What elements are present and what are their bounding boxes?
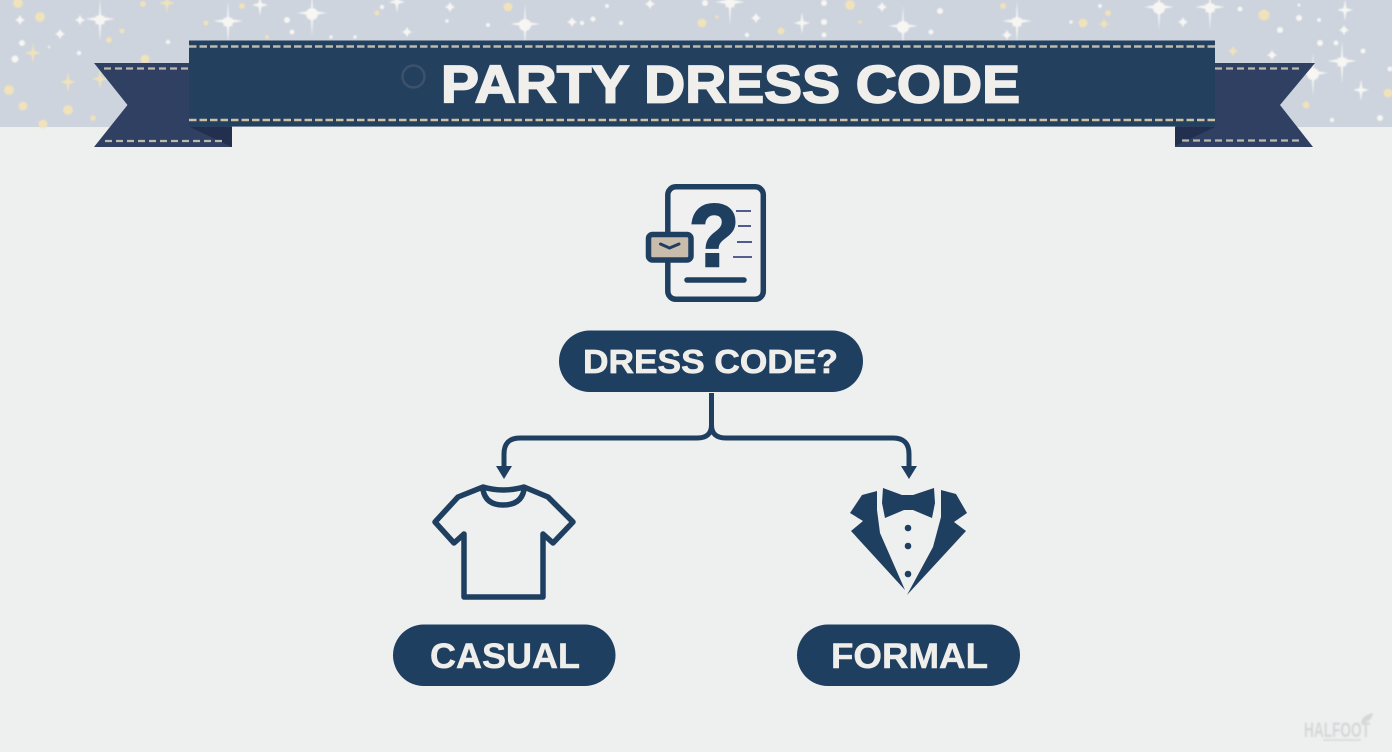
watermark logo xyxy=(1304,713,1373,742)
pill: formal xyxy=(797,624,1020,686)
starry header background xyxy=(0,0,1392,128)
pill: dress code question xyxy=(559,330,863,392)
icon: t-shirt xyxy=(435,487,573,597)
text lines xyxy=(733,211,752,257)
icon: tuxedo xyxy=(850,488,967,595)
title: PARTY DRESS CODE xyxy=(441,56,1020,114)
faint ring ornament xyxy=(402,66,424,88)
bow tie xyxy=(882,488,935,518)
underline bar xyxy=(687,277,744,283)
right ribbon tail xyxy=(1175,63,1315,147)
pill: casual xyxy=(393,624,616,686)
pill: casual: CASUAL xyxy=(430,637,580,676)
main ribbon band xyxy=(189,40,1215,126)
left ribbon tail xyxy=(94,63,232,147)
pill: formal: FORMAL xyxy=(831,637,988,676)
branching arrows xyxy=(496,393,917,479)
left lapel xyxy=(850,491,905,590)
pill: dress code question: DRESS CODE? xyxy=(583,343,838,380)
arrowhead right xyxy=(901,466,917,479)
question mark: ? xyxy=(689,186,739,285)
ribbon banner xyxy=(94,40,1315,147)
watermark tagline smudge xyxy=(1323,739,1361,741)
watermark leaf xyxy=(1361,713,1373,723)
right lapel xyxy=(907,490,967,595)
shirt buttons xyxy=(905,525,911,577)
arrowhead left xyxy=(496,466,512,479)
icon: invitation document with question mark xyxy=(648,186,763,299)
envelope xyxy=(648,234,691,260)
